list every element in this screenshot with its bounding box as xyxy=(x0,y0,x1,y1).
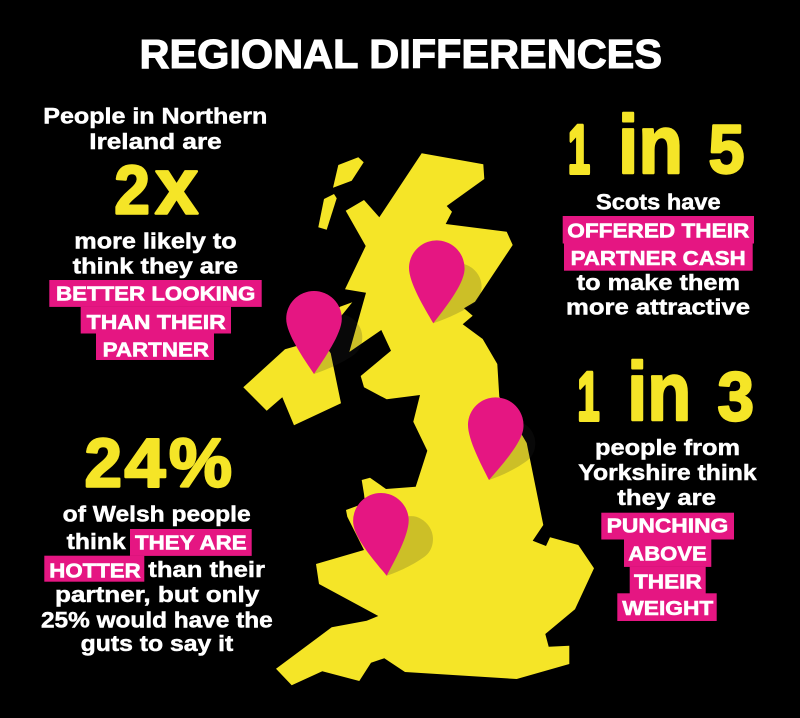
pin: Scotland xyxy=(406,239,482,325)
big number: 24%: 2 xyxy=(84,425,122,502)
big number: 24%: % xyxy=(169,425,232,502)
intro text: Ireland are xyxy=(89,129,222,154)
pin: Northern Ireland xyxy=(286,291,362,374)
map: Ireland xyxy=(243,302,352,425)
map: Shetland islands xyxy=(318,157,364,230)
highlighted text: PARTNER xyxy=(103,339,209,362)
big number: 24%: 4 xyxy=(124,425,166,502)
body text xyxy=(578,435,757,510)
body text: 25% would have the xyxy=(41,607,273,632)
title: REGIONAL DIFFERENCES xyxy=(140,31,662,77)
body text: people from xyxy=(595,435,740,460)
big number: 1 in 3 xyxy=(578,345,754,438)
pin: Wales xyxy=(350,490,433,579)
intro text xyxy=(43,103,267,154)
highlight: they are hotter xyxy=(44,529,252,582)
highlighted text: OFFERED THEIR xyxy=(567,219,749,242)
big number: 2x xyxy=(114,142,198,230)
highlight: they are hotter: HOTTER xyxy=(49,559,141,582)
body text: to make them xyxy=(577,270,740,295)
highlighted text xyxy=(563,216,754,271)
big number: 1 in 3: 1 xyxy=(578,358,600,435)
big number: 1 in 5 xyxy=(568,98,744,191)
panel: Northern Ireland statistic xyxy=(43,103,267,362)
panel: Wales statistic xyxy=(41,425,273,656)
big number: 1 in 5: in xyxy=(618,98,683,191)
body text xyxy=(566,270,750,319)
body text: partner, but only xyxy=(55,582,260,607)
pin: Yorkshire xyxy=(461,394,535,483)
body text: think they are xyxy=(73,253,238,278)
highlighted text: PARTNER CASH xyxy=(571,247,746,270)
big number: 2x: x xyxy=(155,142,198,230)
panel: Yorkshire statistic xyxy=(578,345,757,621)
big number: 1 in 3: 3 xyxy=(718,358,754,435)
body text: guts to say it xyxy=(81,631,234,656)
body text: of Welsh people xyxy=(63,502,251,527)
body text: more attractive xyxy=(566,294,750,319)
body text: more likely to xyxy=(74,228,237,253)
highlighted text: ABOVE xyxy=(628,543,707,566)
body text: they are xyxy=(617,485,716,510)
highlighted text: THEIR xyxy=(634,570,702,593)
big number: 2x: 2 xyxy=(114,152,150,228)
highlighted text: WEIGHT xyxy=(622,597,714,620)
panel: Scotland statistic xyxy=(563,98,754,319)
map: Great Britain xyxy=(276,153,594,685)
intro text: Scots have xyxy=(596,189,721,214)
body text: think xyxy=(67,529,126,554)
UK map with location pins xyxy=(243,153,594,685)
big number: 1 in 3: in xyxy=(627,345,691,438)
big number: 24% xyxy=(84,425,232,502)
intro text: People in Northern xyxy=(43,103,267,128)
body text xyxy=(41,502,273,656)
big number: 1 in 5: 1 xyxy=(568,111,590,188)
highlighted text xyxy=(49,280,262,362)
body text: than their xyxy=(148,557,265,582)
highlight: they are hotter: THEY ARE xyxy=(135,531,247,554)
body text xyxy=(73,228,238,278)
highlighted text: BETTER LOOKING xyxy=(56,283,255,306)
highlighted text: THAN THEIR xyxy=(87,311,226,334)
highlighted text: PUNCHING xyxy=(607,515,728,538)
highlighted text xyxy=(601,513,734,621)
body text: Yorkshire think xyxy=(578,460,757,485)
big number: 1 in 5: 5 xyxy=(708,111,744,188)
